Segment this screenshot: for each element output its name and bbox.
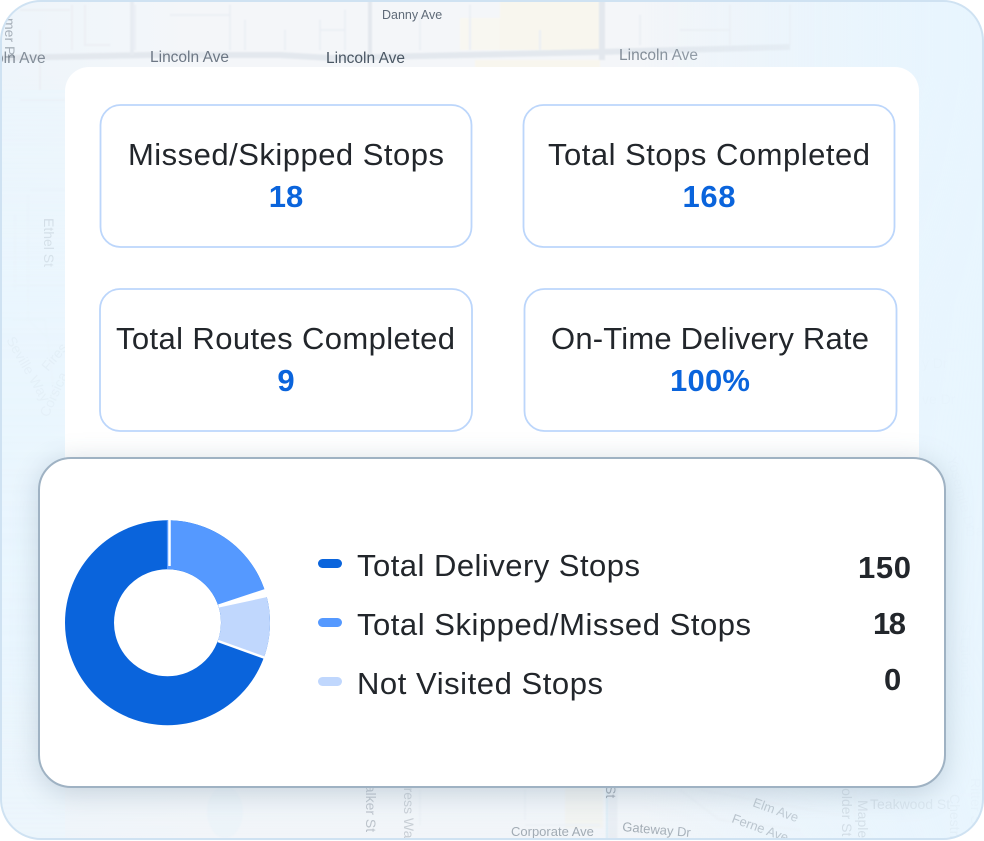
stat card: missed or skipped stops: 18: [269, 179, 303, 214]
delivery breakdown panel: [39, 458, 945, 787]
map labels: Lincoln Ave: [150, 49, 229, 66]
map labels: Gateway Dr: [622, 819, 692, 840]
stat card: total stops completed: Total Stops Completed: [548, 137, 870, 172]
legend: total delivery stops: [318, 548, 911, 585]
map labels: Ritter St: [968, 778, 984, 829]
map labels: Lincoln Ave: [326, 50, 405, 67]
map labels: S Latona St: [958, 624, 974, 697]
map labels: Progress Wa: [401, 758, 417, 839]
stat card: total stops completed: 168: [682, 179, 736, 214]
legend: not visited stops: Not Visited Stops: [357, 666, 603, 701]
panel shadow: [39, 462, 945, 793]
legend: total delivery stops: Total Delivery Stops: [357, 548, 640, 583]
map labels: Fires: [38, 340, 70, 374]
map labels: Ethel St: [41, 218, 57, 267]
stat card: on-time delivery rate: On-Time Delivery Rate: [551, 321, 869, 356]
map labels: y Dr: [922, 355, 948, 371]
map labels: Walker St: [363, 772, 379, 832]
stat card: on-time delivery rate: 100%: [670, 363, 750, 398]
map labels: St: [603, 785, 619, 798]
white stats panel: [65, 67, 919, 497]
map labels: Lincoln Ave: [619, 47, 698, 64]
map labels: Yosemite Dr: [944, 455, 979, 532]
map labels: Elm Ave: [751, 795, 801, 825]
map labels: Corsica: [36, 369, 71, 419]
map labels: Teakwood St: [870, 796, 950, 812]
donut chart: [69, 516, 272, 721]
legend: total skipped or missed stops: 18: [873, 606, 906, 641]
map labels: Holder St: [839, 778, 855, 836]
map labels: mer Pl: [2, 18, 18, 58]
map labels: Corporate Ave: [511, 824, 594, 839]
map labels: Maple: [855, 800, 871, 838]
map labels: Seville Way: [3, 334, 54, 404]
map labels: ve Dr: [922, 391, 956, 407]
stat card: missed or skipped stops: [100, 105, 472, 247]
stat card: missed or skipped stops: Missed/Skipped Stops: [128, 137, 444, 172]
stat card: total routes completed: Total Routes Completed: [116, 321, 455, 356]
stat card: total routes completed: 9: [277, 363, 295, 398]
legend: total delivery stops: 150: [858, 550, 911, 585]
legend: not visited stops: [318, 662, 901, 701]
legend: not visited stops: 0: [884, 662, 901, 697]
stat card: total stops completed: [524, 105, 894, 247]
map labels: Danny Ave: [382, 8, 442, 22]
stat card: total routes completed: [100, 289, 472, 431]
legend: total skipped or missed stops: [318, 606, 906, 642]
stat card: on-time delivery rate: [524, 289, 896, 431]
legend: total skipped or missed stops: Total Skipped/Missed Stops: [357, 607, 751, 642]
map labels: Ba: [965, 523, 984, 540]
